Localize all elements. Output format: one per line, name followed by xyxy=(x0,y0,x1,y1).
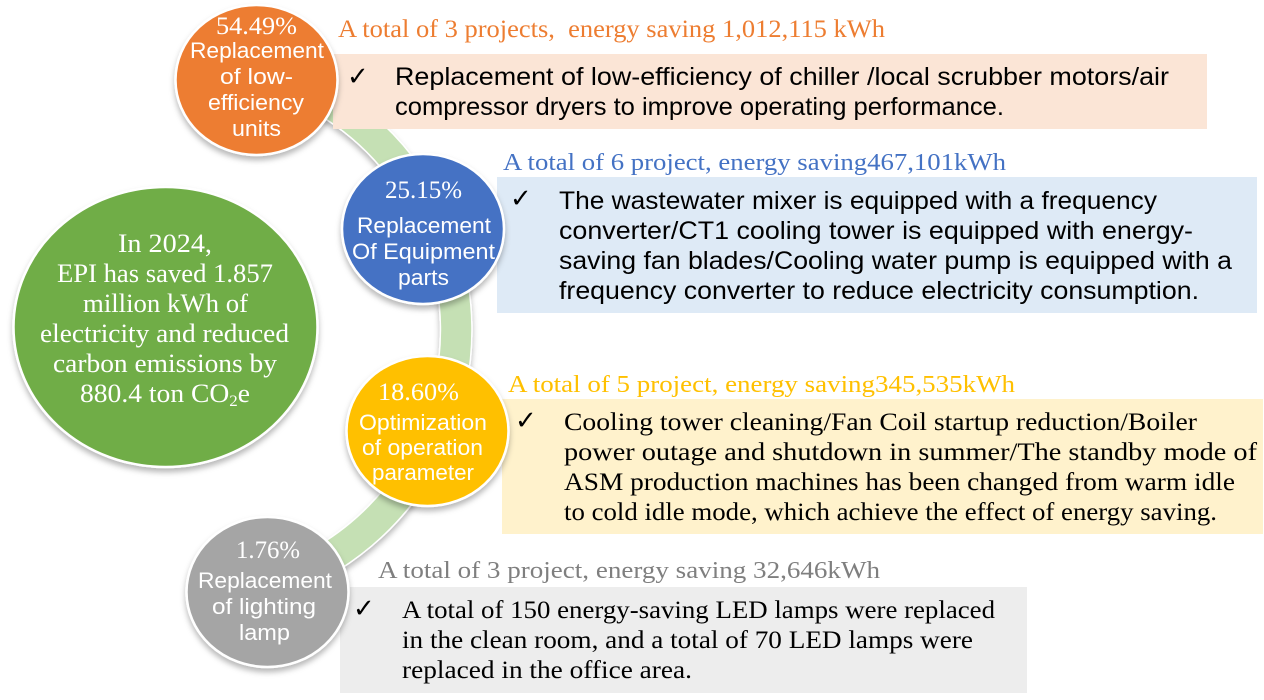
operation parameter detail text: ASM production machines has been changed from warm idle xyxy=(564,469,1235,496)
summary text: e xyxy=(238,379,250,408)
circle: summary xyxy=(14,187,318,467)
percentage: 25.15% xyxy=(385,177,462,204)
label: Replacement xyxy=(190,38,324,63)
percentage: 18.60% xyxy=(378,379,459,406)
heading: lighting lamp total: A total of 3 project, energy saving 32,646kWh xyxy=(378,558,880,584)
operation parameter detail text xyxy=(564,409,1258,526)
panel: lighting lamp detail xyxy=(340,587,1027,693)
label: parts xyxy=(398,265,449,290)
summary text: EPI has saved 1.857 xyxy=(57,259,273,288)
operation parameter detail text: Cooling tower cleaning/Fan Coil startup reduction/Boiler xyxy=(564,409,1198,436)
low-efficiency detail text xyxy=(395,63,1169,121)
label: parameter xyxy=(372,460,474,485)
label xyxy=(352,213,495,290)
lighting lamp detail text: replaced in the office area. xyxy=(402,657,692,684)
lighting lamp detail text xyxy=(402,597,996,684)
label xyxy=(190,38,324,141)
low-efficiency detail text: Replacement of low-efficiency of chiller /local scrubber motors/air xyxy=(395,63,1169,91)
equipment parts detail text: converter/CT1 cooling tower is equipped with energy- xyxy=(559,217,1193,245)
panel: operation parameter detail xyxy=(502,399,1263,534)
label: Optimization xyxy=(359,410,487,435)
label: lamp xyxy=(239,620,290,645)
low-efficiency detail text: compressor dryers to improve operating performance. xyxy=(395,93,1004,121)
label: of lighting xyxy=(212,594,316,619)
summary text: electricity and reduced xyxy=(40,319,289,348)
label: units xyxy=(232,116,281,141)
circle: 18.60% operation parameter xyxy=(346,356,508,506)
icon: check mark: ✓ xyxy=(347,62,369,92)
equipment parts detail text: The wastewater mixer is equipped with a frequency xyxy=(559,187,1158,215)
summary text xyxy=(40,229,289,410)
label xyxy=(198,568,332,645)
label: efficiency xyxy=(208,90,304,115)
label: Replacement xyxy=(357,213,491,238)
heading: operation parameter total: A total of 5 project, energy saving345,535kWh xyxy=(508,372,1015,398)
circle: 25.15% equipment parts xyxy=(342,154,504,304)
panel: low-efficiency units detail xyxy=(333,54,1207,129)
connecting arc xyxy=(258,72,456,586)
icon: check mark: ✓ xyxy=(510,184,532,214)
circle: 54.49% low-efficiency units xyxy=(176,5,338,155)
operation parameter detail text: to cold idle mode, which achieve the effect of energy saving. xyxy=(564,499,1217,526)
percentage: 1.76% xyxy=(236,537,300,564)
summary text: 880.4 ton CO xyxy=(80,379,221,408)
equipment parts detail text xyxy=(559,187,1232,305)
circle: 1.76% lighting lamp xyxy=(186,517,348,667)
label: Of Equipment xyxy=(352,239,495,264)
summary text: million kWh of xyxy=(83,289,248,318)
icon: check mark: ✓ xyxy=(353,594,375,624)
lighting lamp detail text: in the clean room, and a total of 70 LED lamps were xyxy=(402,627,973,654)
summary text: 2 xyxy=(229,393,238,410)
summary text: carbon emissions by xyxy=(53,349,277,378)
label xyxy=(359,410,487,485)
summary text: In 2024, xyxy=(118,229,212,258)
label: of low- xyxy=(220,64,293,89)
label: of operation xyxy=(362,435,483,460)
equipment parts detail text: frequency converter to reduce electricity consumption. xyxy=(559,277,1199,305)
icon: check mark: ✓ xyxy=(515,406,537,436)
heading: equipment parts total: A total of 6 project, energy saving467,101kWh xyxy=(503,150,1006,176)
percentage: 54.49% xyxy=(216,13,297,40)
lighting lamp detail text: A total of 150 energy-saving LED lamps were replaced xyxy=(402,597,996,624)
panel: equipment parts detail xyxy=(497,177,1257,313)
heading: low-efficiency units total: A total of 3 projects, energy saving 1,012,115 kWh xyxy=(338,16,886,43)
label: Replacement xyxy=(198,568,332,593)
operation parameter detail text: power outage and shutdown in summer/The standby mode of xyxy=(564,439,1258,466)
equipment parts detail text: saving fan blades/Cooling water pump is equipped with a xyxy=(559,247,1232,275)
